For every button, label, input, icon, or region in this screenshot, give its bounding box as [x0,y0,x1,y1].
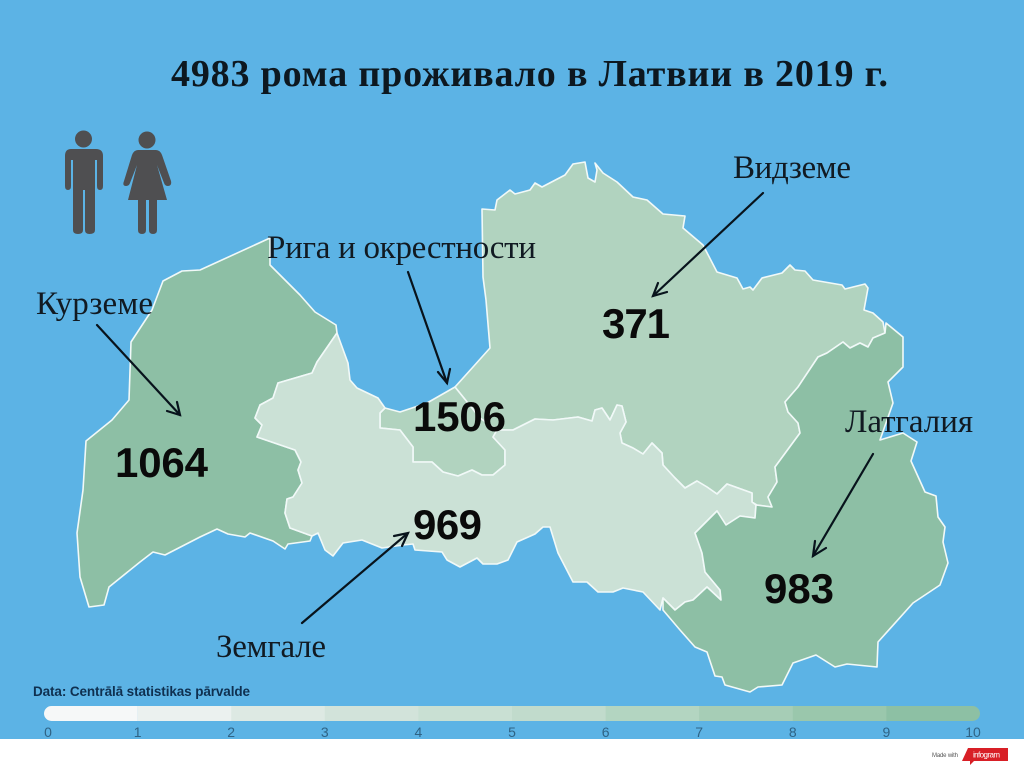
icon: woman [123,132,171,234]
legend ticks: 1 [134,724,142,740]
title: 4983 рома проживало в Латвии в 2019 г. [171,53,888,95]
value: Latgale 983: 983 [764,565,834,612]
legend ticks: 10 [965,724,981,740]
label: Zemgale: Земгале [216,629,326,665]
region: Riga and surroundings [380,387,505,476]
legend ticks: 8 [789,724,797,740]
legend ticks: 5 [508,724,516,740]
value: Zemgale 969: 969 [413,501,482,548]
arrow: Zemgale [302,533,408,623]
region: Zemgale [255,333,756,610]
region: Vidzeme [455,162,885,507]
arrow: Vidzeme [653,193,763,296]
legend ticks: 4 [415,724,423,740]
map of Latvia [77,162,948,692]
arrow: Latgale [813,454,873,556]
legend ticks [44,724,981,740]
region: Kurzeme [77,238,337,607]
arrow: Riga [408,272,450,383]
label: Vidzeme: Видземе [733,150,851,186]
value: Kurzeme 1064: 1064 [115,439,209,486]
legend ticks: 0 [44,724,52,740]
legend ticks: 9 [883,724,891,740]
value: Vidzeme 371: 371 [602,300,670,347]
legend bar [44,706,980,721]
legend ticks: 3 [321,724,329,740]
legend ticks: 7 [695,724,703,740]
legend scale [44,706,981,740]
label: Riga and surroundings: Рига и окрестности [267,230,536,266]
legend ticks: 6 [602,724,610,740]
region: Latgale [663,323,948,692]
data source: Data: Centrālā statistikas pārvalde [33,684,250,699]
arrow: Kurzeme [97,325,180,415]
infogram logo: infogram [973,750,1000,760]
icon: man and woman [65,130,171,234]
icon: man [65,130,103,234]
label: Kurzeme: Курземе [36,286,153,322]
made with text: Made with [932,753,958,759]
footer branding [932,748,1008,765]
label: Latgale: Латгалия [845,404,973,440]
legend ticks: 2 [227,724,235,740]
value: Riga 1506: 1506 [413,393,506,440]
